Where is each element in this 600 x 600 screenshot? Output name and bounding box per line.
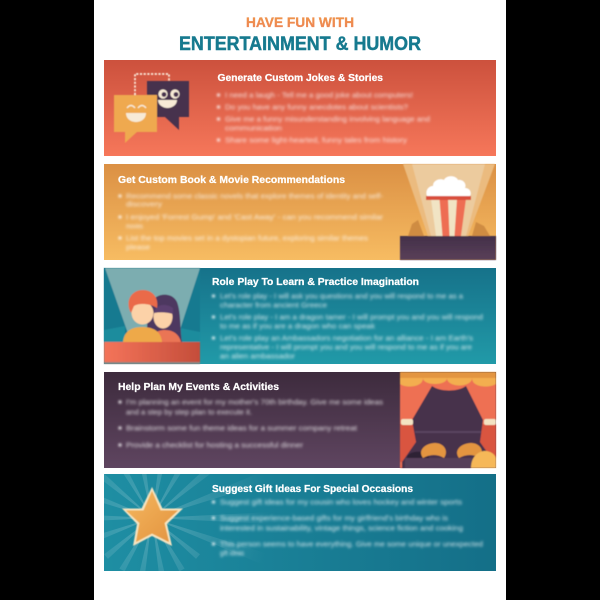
bullet list: gift ideas [220,550,244,558]
bullet list [118,400,384,450]
bullet list: to me as if you are a dragon who can speak [220,324,376,330]
heading: Generate Custom Jokes & Stories [218,73,383,84]
illustration: couple in spotlight [104,268,200,364]
bullet list: Suggest gift ideas for my cousin who loves hockey and winter sports [220,500,463,506]
bullet list: please [126,244,150,252]
icon: popcorn on stage [400,164,496,260]
bullet list: Do you have any funny anecdotes about scientists? [225,104,408,112]
bullet list: Let's role play an Ambassadors negotiation for an alliance - I am Earth's [220,336,474,342]
title: ENTERTAINMENT & HUMOR [179,33,421,55]
panel: custom jokes and stories [104,60,496,156]
heading: Help Plan My Events & Activities [118,382,279,393]
bullet list: Let's role play - I am a dragon tamer - I will prompt you and you will respond [220,314,483,322]
bullet list: I'm planning an event for my mother's 70th birthday. Give me some ideas [126,400,384,406]
heading: Role Play To Learn & Practice Imagination [212,277,419,288]
bullet list: Recommend some classic novels that explore themes of identity and self- [126,194,384,200]
bullet list: and a step by step plan to execute it. [126,410,252,416]
bullet list [212,500,483,558]
bullet list: I need a laugh - Tell me a good joke about computers! [225,92,413,100]
title: HAVE FUN WITH [246,14,354,30]
title [179,14,421,55]
icon: star with sunburst [104,474,250,571]
bullet list: Provide a checklist for hosting a successful dinner [126,442,304,450]
bullet list: Share some light-hearted, funny tales from history [225,138,408,144]
bullet list: This person seems to have everything. Give me some unique or unexpected [220,542,483,548]
bullet list [217,92,430,144]
bullet list: interested in sustainability, vintage things, science fiction and cooking [220,526,463,532]
bullet list: communication [225,126,282,132]
bullet list [118,194,384,252]
panel: role play [104,268,496,364]
bullet list: movies [126,224,143,230]
bullet list: I enjoyed 'Forrest Gump' and 'Cast Away' - can you recommend similar [126,214,384,222]
bullet list: Let's role play - I will ask you questions and you will respond to me as a [220,294,463,300]
bullet list: Give me a funny misunderstanding involving language and [225,116,430,124]
bullet list: character from ancient Greece [220,302,327,310]
panel: plan events [104,372,496,468]
icon: chat bubbles [114,74,189,143]
panel: book and movie recommendations [104,164,496,260]
bullet list: discovery [126,202,163,208]
bullet list [212,294,483,360]
bullet list: Suggest experience-based gifts for my girlfriend's birthday who is [220,516,449,522]
bullet list: an alien ambassador [220,354,296,360]
page background [94,0,506,600]
bullet list: List the top movies set in a dystopian future, exploring similar themes [126,236,369,242]
bullet list: representative - I will prompt you and you will respond to me as if you are [220,344,472,352]
heading: Suggest Gift Ideas For Special Occasions [212,484,413,495]
panel: gift ideas [104,474,496,571]
illustration: theatre curtains [400,372,496,468]
heading: Get Custom Book & Movie Recommendations [118,175,345,186]
bullet list: Brainstorm some fun theme ideas for a summer company retreat [126,426,357,432]
